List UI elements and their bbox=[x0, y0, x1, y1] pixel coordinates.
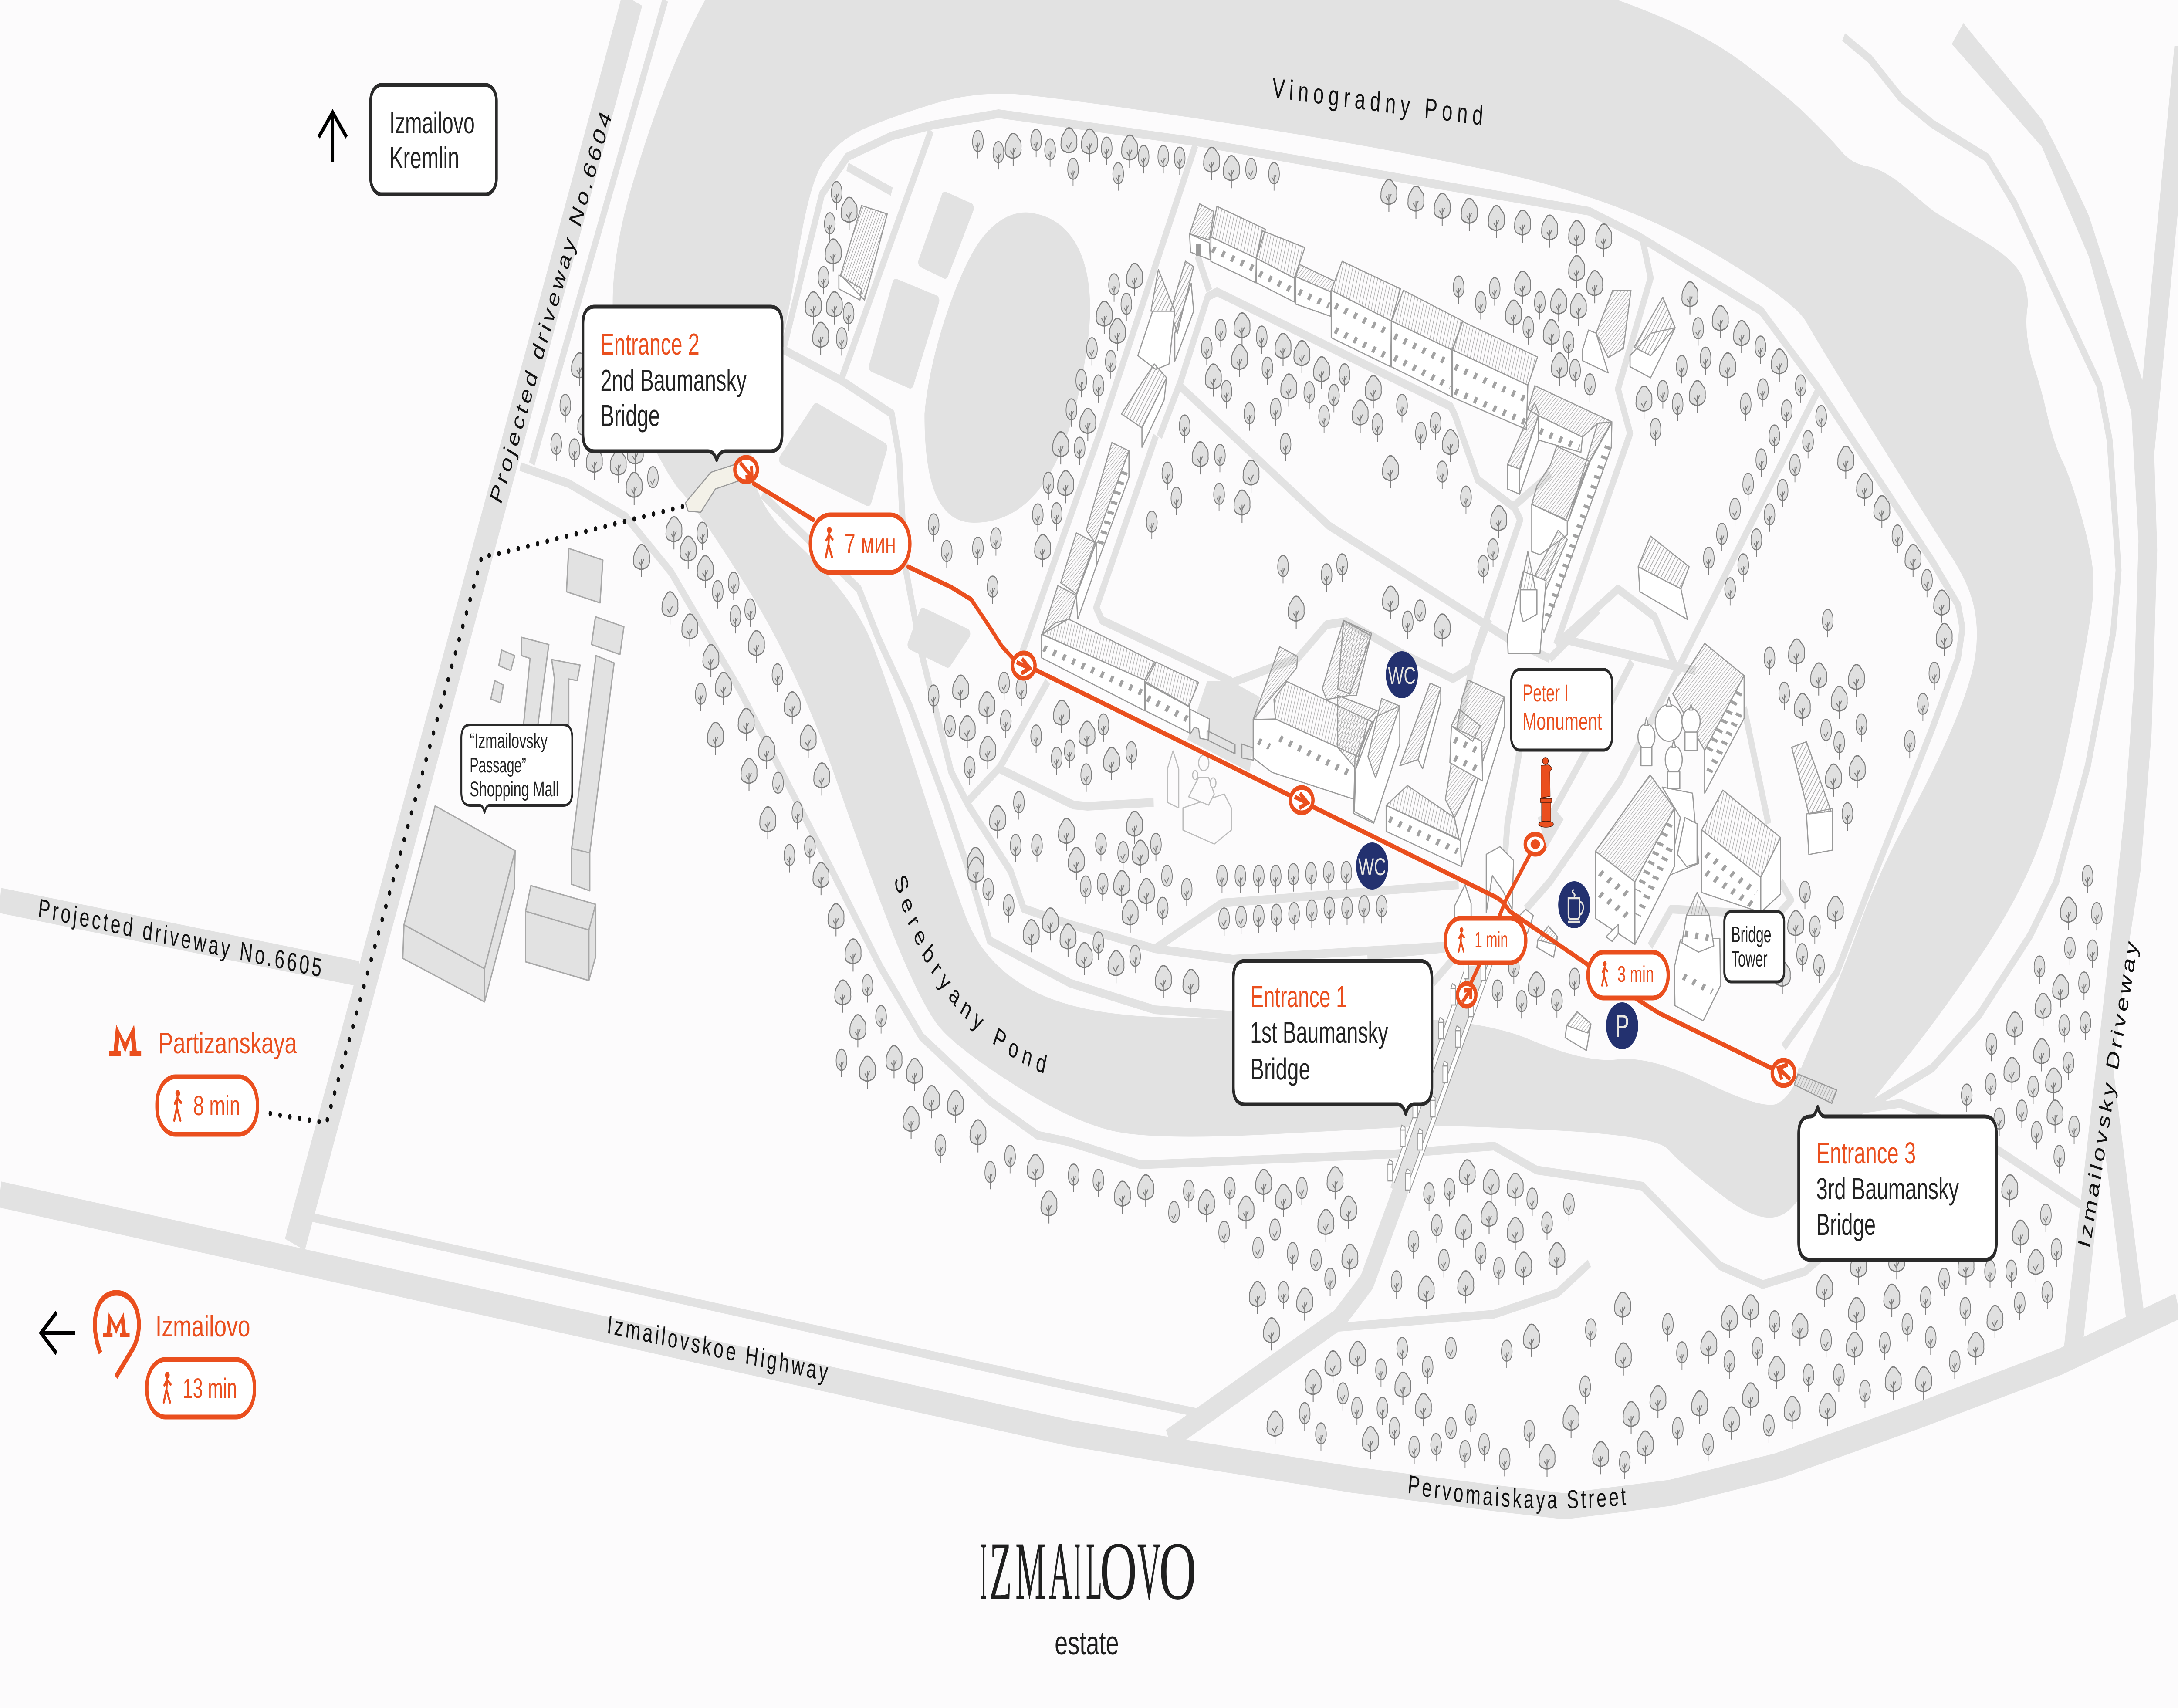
parking icon: P bbox=[1615, 1009, 1629, 1044]
trees: northeast sector bbox=[928, 128, 1952, 880]
trees: southeast sector bbox=[1068, 862, 2102, 1479]
dotted walking path from metro bbox=[265, 507, 683, 1123]
label: Projected driveway No.6604: Projected driveway No.6604 bbox=[486, 107, 616, 507]
marker: Entrance 1 ring bbox=[1458, 984, 1476, 1006]
label: Izmailovsky Driveway: Izmailovsky Driveway bbox=[2074, 938, 2141, 1251]
metro: Partizanskaya bbox=[109, 1025, 297, 1060]
icon: Peter I statue bbox=[1539, 758, 1553, 827]
callout: Peter I Monument: Peter I bbox=[1522, 680, 1569, 707]
logo: Izmailovo estate: O bbox=[1100, 1525, 1137, 1617]
central buildings, cathedral and bridge tower bbox=[1338, 621, 1780, 1051]
callout: Izmailovsky Passage Shopping Mall: Passage” bbox=[470, 754, 526, 777]
wc icon bbox=[1386, 651, 1418, 698]
callout: Peter I Monument bbox=[1511, 670, 1612, 750]
callout: Entrance 2: 2nd Baumansky bbox=[600, 363, 747, 397]
callout: Entrance 3: 3rd Baumansky bbox=[1816, 1172, 1959, 1206]
callout: Entrance 2: Bridge bbox=[600, 399, 660, 433]
water: ponds bbox=[613, 0, 2093, 1218]
logo: Izmailovo estate: V bbox=[1137, 1525, 1161, 1617]
callout: Bridge Tower: Bridge bbox=[1731, 922, 1771, 947]
left arrow to Izmailovo metro bbox=[41, 1312, 75, 1353]
west wing and south wing buildings bbox=[1042, 443, 1375, 823]
ghost church in light outline bbox=[1167, 751, 1231, 844]
pill: 3 min walk: 3 min bbox=[1617, 962, 1654, 987]
wc icon: WC bbox=[1358, 854, 1386, 881]
callout: Izmailovsky Passage Shopping Mall bbox=[461, 725, 572, 812]
callout: Izmailovo Kremlin: Izmailovo bbox=[389, 106, 475, 140]
label: Izmailovskoe Highway: Izmailovskoe Highway bbox=[606, 1310, 829, 1387]
logo: Izmailovo estate: estate bbox=[1055, 1624, 1119, 1661]
callout: Izmailovsky Passage Shopping Mall: Shopping Mall bbox=[470, 778, 559, 801]
metro pin: Izmailovo bbox=[95, 1293, 250, 1377]
pill: 7 min walk bbox=[810, 515, 910, 572]
marker: route direction ring bbox=[1012, 653, 1035, 678]
north wing buildings bbox=[1190, 204, 1631, 653]
pill: 13 min walk: 13 min bbox=[183, 1373, 237, 1404]
callout: Entrance 1: Bridge bbox=[1250, 1052, 1310, 1086]
pill: 13 min walk bbox=[147, 1360, 254, 1417]
pill: 3 min walk bbox=[1588, 952, 1668, 998]
urban buildings west of the pond bbox=[491, 548, 624, 728]
grounds roads network bbox=[311, 0, 2119, 1413]
callout: Entrance 3: Bridge bbox=[1816, 1207, 1876, 1241]
logo: Izmailovo estate bbox=[981, 1525, 1197, 1661]
label: Projected driveway No.6605: Projected driveway No.6605 bbox=[37, 893, 323, 983]
label: Serebryany Pond: Serebryany Pond bbox=[890, 870, 1054, 1082]
sports fields and stadium bbox=[783, 197, 1260, 772]
2nd Baumansky Bridge bbox=[685, 464, 739, 512]
callout: Entrance 2: Entrance 2 bbox=[600, 327, 700, 361]
urban buildings: tall block and shopping mall bbox=[403, 656, 614, 1002]
island: estate grounds bbox=[751, 94, 1977, 1105]
callout: Izmailovo Kremlin: Kremlin bbox=[389, 141, 459, 175]
logo: Izmailovo estate: M bbox=[1015, 1525, 1046, 1617]
callout: Izmailovo Kremlin bbox=[371, 85, 497, 194]
wc icon: WC bbox=[1388, 663, 1416, 690]
marker: Entrance 3 ring bbox=[1772, 1060, 1795, 1086]
label: Vinogradny Pond: Vinogradny Pond bbox=[1271, 72, 1484, 131]
pill: 1 min walk bbox=[1445, 918, 1526, 963]
3rd Baumansky Bridge bbox=[1794, 1074, 1837, 1103]
plinth patch bbox=[1538, 808, 1563, 848]
road: Projected driveway No.6604 bbox=[295, 0, 632, 1245]
wc icon bbox=[1356, 842, 1388, 890]
parking icon bbox=[1606, 1002, 1638, 1049]
north arrow to Izmailovo Kremlin bbox=[319, 112, 347, 162]
road: Izmailovsky Driveway bbox=[1952, 23, 2178, 1348]
marker: route direction ring bbox=[1290, 788, 1313, 813]
marker: Peter I Monument target bbox=[1525, 834, 1546, 854]
cafe icon bbox=[1558, 881, 1590, 928]
callout: Bridge Tower bbox=[1725, 912, 1784, 982]
callout: Entrance 2 bbox=[583, 307, 782, 460]
callout: Bridge Tower: Tower bbox=[1731, 947, 1768, 972]
road: Izmailovskoe Highway and Pervomaiskaya Street bbox=[0, 1194, 2178, 1506]
road: bridge approach bbox=[1169, 1186, 1402, 1440]
callout: Entrance 3 bbox=[1799, 1107, 1996, 1260]
label: Pervomaiskaya Street: Pervomaiskaya Street bbox=[1407, 1470, 1629, 1514]
pill: 8 min walk: 8 min bbox=[193, 1090, 240, 1121]
pill: 1 min walk: 1 min bbox=[1475, 927, 1508, 953]
logo: Izmailovo estate: L bbox=[1086, 1525, 1102, 1617]
pill: 8 min walk bbox=[157, 1077, 257, 1134]
east outbuildings and west tower bbox=[1122, 261, 1833, 855]
logo: Izmailovo estate: I bbox=[1075, 1525, 1080, 1617]
callout: Peter I Monument: Monument bbox=[1522, 708, 1602, 735]
logo: Izmailovo estate: O bbox=[1159, 1525, 1197, 1617]
callout: Entrance 1: 1st Baumansky bbox=[1250, 1015, 1388, 1049]
trees: northwest sector bbox=[551, 182, 857, 873]
callout: Entrance 1 bbox=[1233, 961, 1432, 1114]
logo: Izmailovo estate: A bbox=[1049, 1525, 1072, 1617]
1st Baumansky Bridge bbox=[1388, 957, 1491, 1197]
route lines bbox=[754, 484, 1771, 1068]
pill: 7 min walk: 7 мин bbox=[845, 529, 896, 559]
metro pin: Izmailovo: Izmailovo bbox=[156, 1310, 250, 1343]
trees: southwest sector bbox=[813, 857, 1076, 1224]
metro: Partizanskaya: Partizanskaya bbox=[159, 1027, 297, 1060]
callout: Entrance 1: Entrance 1 bbox=[1250, 980, 1347, 1014]
callout: Izmailovsky Passage Shopping Mall: “Izmailovsky bbox=[470, 729, 548, 753]
callout: Entrance 3: Entrance 3 bbox=[1816, 1136, 1916, 1170]
northwest outbuilding bbox=[839, 206, 887, 300]
logo: Izmailovo estate: Z bbox=[990, 1525, 1012, 1617]
logo: Izmailovo estate: I bbox=[981, 1525, 987, 1617]
marker: Entrance 2 ring bbox=[735, 457, 758, 482]
road: Projected driveway No.6605 bbox=[0, 900, 358, 974]
